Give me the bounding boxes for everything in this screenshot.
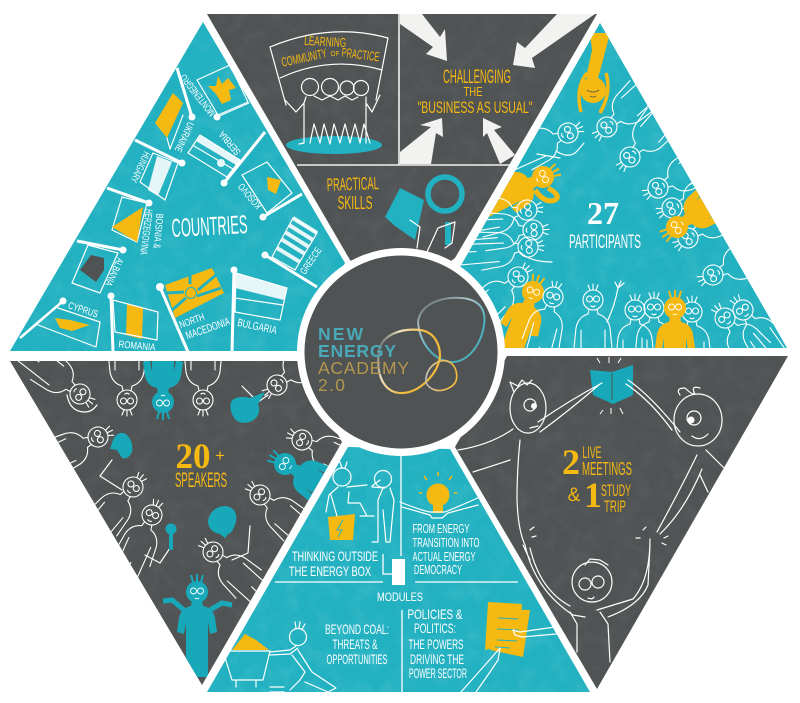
text: and 1 study trip — [568, 475, 631, 516]
flag: Romania — [108, 292, 158, 354]
text: 2 live meetings — [562, 442, 632, 482]
speech bubble: left — [110, 433, 132, 458]
flag: Kosovo: KOSOVO — [236, 181, 264, 211]
panel: meetings — [455, 354, 790, 692]
flag: Bulgaria: BULGARIA — [236, 317, 278, 337]
text: practical skills: PRACTICAL — [326, 173, 379, 195]
text: policies and politics: THE POWERS — [408, 636, 464, 652]
speaker figures — [18, 361, 341, 677]
flag: Romania: ROMANIA — [118, 339, 156, 354]
text: from energy transition into actual energy democracy: DEMOCRACY — [414, 562, 462, 577]
icon: book and magnifier held in hands — [385, 177, 462, 252]
flag: Serbia: SERBIA — [217, 128, 244, 157]
panel: countries — [8, 20, 348, 355]
flag: Greece — [262, 218, 324, 287]
text: practical skills: SKILLS — [338, 193, 372, 213]
text: from energy transition into actual energy democracy — [412, 521, 480, 577]
text: from energy transition into actual energy democracy: TRANSITION INTO — [412, 535, 480, 550]
flag: Greece: GREECE — [298, 246, 324, 277]
text: 2 live meetings: 2 — [562, 442, 580, 482]
text: and 1 study trip: TRIP — [604, 497, 626, 516]
flag: Serbia — [188, 128, 265, 186]
flag: Hungary: HUNGARY — [127, 150, 152, 184]
arrow: top left — [400, 14, 447, 61]
modules label: MODULES — [377, 590, 423, 604]
text: policies and politics: POWER SECTOR — [409, 665, 467, 681]
number 20+: 20 — [176, 436, 210, 476]
participants label: PARTICIPANTS — [569, 232, 641, 253]
flag: Albania — [72, 241, 126, 293]
flag: Kosovo — [236, 162, 302, 220]
icon: lightbulb held in hand — [400, 472, 480, 518]
center logo: New Energy Academy 2.0 — [297, 248, 505, 456]
logo wordmark: ACADEMY — [318, 358, 409, 378]
flag: Bosnia and Herzegovina: BOSNIA & — [150, 213, 165, 249]
flag: Albania: ALBANIA — [102, 256, 125, 288]
flag: Hungary — [127, 140, 186, 200]
logo wordmark: NEW — [318, 324, 363, 344]
flag: Montenegro: MONTENEGRO — [179, 71, 218, 118]
flag: North Macedonia: NORTH — [178, 312, 206, 331]
panel: modules — [205, 445, 595, 695]
arrow: bottom left — [400, 118, 443, 164]
divider lines — [297, 14, 510, 165]
figures holding up the book — [458, 380, 724, 662]
number 20+: + — [215, 446, 225, 465]
illustration: learning community of practice banner: LEARNING — [304, 33, 347, 50]
illustration: learning community of practice banner: OF — [330, 51, 340, 58]
illustration: learning community of practice banner: COMMUNITY — [280, 45, 328, 70]
arrow: bottom right — [483, 118, 515, 164]
text: practical skills — [326, 173, 379, 213]
text: and 1 study trip: 1 — [584, 475, 602, 515]
text: from energy transition into actual energy democracy: ACTUAL ENERGY — [412, 549, 476, 564]
text: beyond coal threats and opportunities — [325, 621, 389, 667]
central box — [392, 559, 405, 585]
arrow: top right — [513, 14, 595, 68]
logo wordmark: ENERGY — [318, 341, 396, 361]
speech bubble: top — [230, 392, 265, 423]
panel: speakers — [10, 361, 342, 685]
text: and 1 study trip: STUDY — [601, 481, 631, 500]
icon: documents with pointing hands — [461, 602, 556, 692]
flag: Bosnia and Herzegovina: HERZEGOVINA — [137, 208, 154, 256]
logo rings — [378, 298, 484, 393]
text: beyond coal threats and opportunities: OPPORTUNITIES — [326, 651, 388, 667]
text: beyond coal threats and opportunities: BEYOND COAL: — [325, 621, 389, 637]
speech bubble: lower — [208, 506, 236, 538]
logo wordmark — [318, 324, 409, 395]
flag: Ukraine: UKRAINE — [172, 120, 195, 154]
flag: Bosnia and Herzegovina — [107, 188, 165, 256]
illustration: learning community of practice banner — [270, 32, 388, 154]
text: challenging the business as usual: THE — [464, 84, 483, 99]
text: thinking outside the energy box: THE ENERGY BOX — [289, 563, 371, 579]
flag: North Macedonia — [156, 268, 232, 352]
module dividers — [275, 455, 518, 692]
flag: Ukraine — [155, 68, 196, 154]
text: challenging the business as usual — [418, 67, 532, 117]
flag: Cyprus — [20, 298, 100, 347]
illustration: person stepping out of energy box — [326, 462, 394, 542]
group of participant figures — [461, 33, 785, 348]
flag: Cyprus: CYPRUS — [66, 300, 100, 321]
text: policies and politics: DRIVING THE — [410, 651, 464, 667]
number 27: 27 — [587, 195, 619, 231]
text: challenging the business as usual: CHALLENGING — [443, 67, 511, 88]
text: 2 live meetings: LIVE — [582, 443, 602, 462]
text: thinking outside the energy box: THINKING OUTSIDE — [292, 548, 378, 564]
text: 2 live meetings: MEETINGS — [582, 459, 632, 479]
text: and 1 study trip: & — [568, 485, 581, 506]
text: policies and politics — [408, 606, 467, 681]
text: policies and politics: POLICIES & — [408, 606, 463, 622]
logo wordmark: 2.0 — [318, 375, 345, 395]
text: policies and politics: POLITICS: — [414, 620, 456, 636]
text: from energy transition into actual energy democracy: FROM ENERGY — [412, 521, 470, 536]
illustration: learning community of practice banner: PRACTICE — [341, 45, 381, 64]
flag: Montenegro — [179, 65, 249, 120]
flag: North Macedonia: MACEDONIA — [184, 316, 232, 342]
text: challenging the business as usual: "BUSINESS AS USUAL" — [418, 98, 532, 117]
illustration: person pushing coal cart — [223, 622, 336, 692]
panel: participants — [460, 23, 787, 348]
heading: countries: COUNTRIES — [171, 209, 248, 243]
text: thinking outside the energy box — [289, 548, 378, 579]
icon: microphone — [166, 524, 176, 550]
panel: learning and challenging — [207, 14, 597, 261]
icon: open book — [590, 357, 633, 414]
text: beyond coal threats and opportunities: THREATS & — [332, 636, 378, 652]
panel: speakers: SPEAKERS — [175, 469, 227, 492]
flag: Bulgaria — [230, 266, 287, 352]
